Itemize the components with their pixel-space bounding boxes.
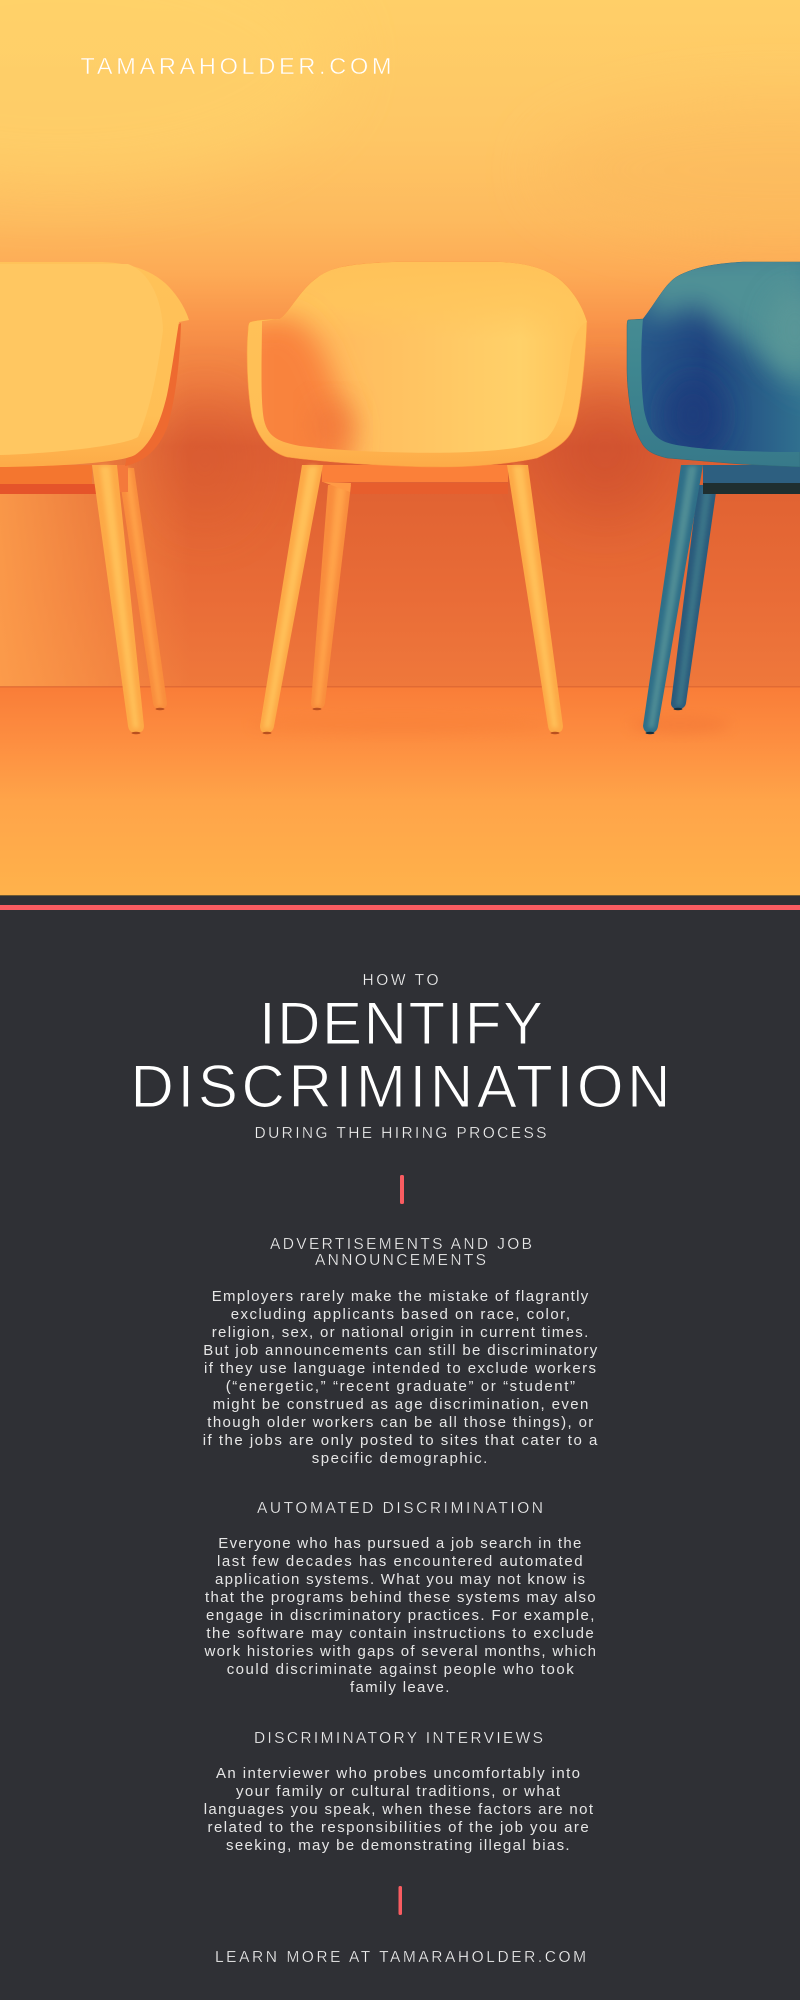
section heading: DISCRIMINATORY INTERVIEWS xyxy=(254,1730,543,1747)
seat rails xyxy=(703,465,800,483)
section: discriminatory interviews xyxy=(204,1730,594,1854)
section text: (“energetic,” “recent graduate” or “student” xyxy=(226,1378,575,1395)
section text xyxy=(204,1765,594,1854)
section text: if they use language intended to exclude workers xyxy=(204,1360,596,1377)
section text: excluding applicants based on race, color, xyxy=(231,1306,570,1323)
seat rails xyxy=(322,465,508,482)
section text: specific demographic. xyxy=(312,1450,487,1467)
wall xyxy=(0,0,800,687)
back leg xyxy=(118,468,167,709)
front legs xyxy=(260,465,323,733)
back leg xyxy=(671,485,717,709)
section text: your family or cultural traditions, or what xyxy=(236,1783,561,1800)
seat interior xyxy=(0,264,163,455)
footer call to action: LEARN MORE AT TAMARAHOLDER.COM xyxy=(215,1949,586,1966)
front leg xyxy=(643,465,703,733)
section: automated discrimination xyxy=(204,1500,596,1696)
shell xyxy=(627,262,800,467)
photo: three chairs against orange wall xyxy=(0,0,800,895)
section text: could discriminate against people who took xyxy=(227,1661,574,1678)
main title: IDENTIFY xyxy=(259,990,543,1057)
main title line 2: DISCRIMINATION xyxy=(130,1053,670,1120)
section text: Employers rarely make the mistake of flagrantly xyxy=(212,1288,589,1305)
section text: An interviewer who probes uncomfortably into xyxy=(216,1765,580,1782)
section text: religion, sex, or national origin in current times. xyxy=(212,1324,588,1341)
section text: languages you speak, when these factors are not xyxy=(204,1801,594,1818)
section text: Everyone who has pursued a job search in the xyxy=(218,1535,581,1552)
seat interior xyxy=(262,262,587,453)
section heading: ADVERTISEMENTS AND JOB xyxy=(270,1236,532,1253)
left yellow chair xyxy=(0,262,189,734)
section text: But job announcements can still be discriminatory xyxy=(203,1342,598,1359)
section heading: AUTOMATED DISCRIMINATION xyxy=(257,1500,543,1517)
middle yellow chair xyxy=(240,262,590,734)
title block xyxy=(130,972,670,1142)
coral divider line xyxy=(0,905,800,910)
subtitle: DURING THE HIRING PROCESS xyxy=(254,1125,546,1142)
section text: that the programs behind these systems may also xyxy=(205,1589,596,1606)
section text: if the jobs are only posted to sites that cater to a xyxy=(203,1432,598,1449)
floor xyxy=(0,687,800,895)
seat interior xyxy=(641,262,800,452)
section text xyxy=(203,1288,598,1467)
back leg xyxy=(311,485,351,709)
shell xyxy=(247,262,587,467)
section: advertisements and job announcements xyxy=(203,1236,598,1467)
section text: work histories with gaps of several months, which xyxy=(204,1643,596,1660)
section text xyxy=(204,1535,596,1696)
section text: family leave. xyxy=(350,1679,449,1696)
kicker: HOW TO xyxy=(362,972,438,989)
section text: application systems. What you may not know is xyxy=(215,1571,585,1588)
section text: engage in discriminatory practices. For example, xyxy=(206,1607,594,1624)
site name: TAMARAHOLDER.COM xyxy=(80,53,392,79)
section text: though older workers can be all those things), or xyxy=(207,1414,593,1431)
section text: related to the responsibilities of the job you are xyxy=(208,1819,589,1836)
shell xyxy=(0,262,189,467)
front leg xyxy=(92,465,144,733)
section text: seeking, may be demonstrating illegal bias. xyxy=(226,1837,570,1854)
coral accent bar xyxy=(400,1175,404,1204)
right blue chair xyxy=(627,250,800,734)
section text: the software may contain instructions to exclude xyxy=(206,1625,594,1642)
section text: last few decades has encountered automated xyxy=(217,1553,583,1570)
section heading: ANNOUNCEMENTS xyxy=(315,1252,486,1269)
coral accent bar xyxy=(398,1886,402,1915)
section heading xyxy=(270,1236,532,1269)
side of shell in shadow xyxy=(125,323,181,466)
section text: might be construed as age discrimination, even xyxy=(213,1396,588,1413)
